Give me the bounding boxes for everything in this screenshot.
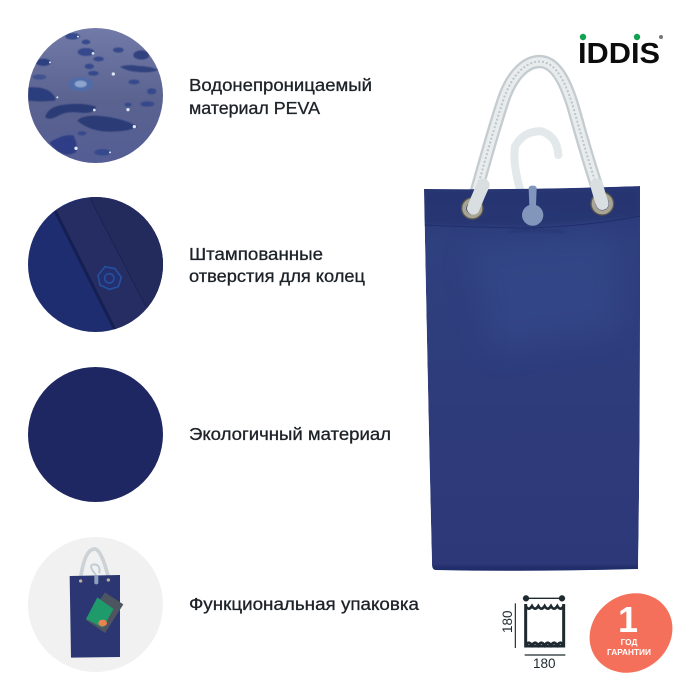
- bag rope handle: [472, 62, 602, 205]
- circle photo: functional packaging: [28, 537, 163, 672]
- warranty caption: ГОД: [621, 637, 638, 647]
- bag body: [424, 186, 640, 580]
- logo: IDDIS: IDDIS: [578, 38, 660, 70]
- circle photo: stamped hole for rings: [28, 197, 167, 333]
- grommets: [462, 185, 614, 226]
- circle photo: water droplets: [28, 28, 163, 163]
- feature text: stamped holes: отверстия для колец: [189, 266, 365, 286]
- feature text: eco material: Экологичный материал: [189, 424, 391, 444]
- feature text: stamped holes: [189, 244, 365, 286]
- product: hanging bag: [424, 62, 640, 580]
- warranty badge: [574, 577, 688, 689]
- circle photo: eco material: [28, 367, 163, 502]
- feature text: waterproof material: Водонепроницаемый: [189, 75, 372, 95]
- size icon: 180 x 180 curtain: [500, 595, 565, 671]
- feature text: waterproof material: материал PEVA: [189, 98, 321, 118]
- feature text: waterproof material: [189, 75, 372, 118]
- width label: 180: [533, 656, 556, 671]
- warranty number: 1: [618, 599, 638, 640]
- icon: stamped octagon ring: [98, 267, 121, 289]
- height label: 180: [500, 610, 515, 633]
- feature text: stamped holes: Штампованные: [189, 244, 323, 264]
- warranty caption: ГАРАНТИИ: [607, 647, 651, 657]
- feature text: packaging: Функциональная упаковка: [189, 594, 419, 614]
- hook tab: [522, 186, 543, 226]
